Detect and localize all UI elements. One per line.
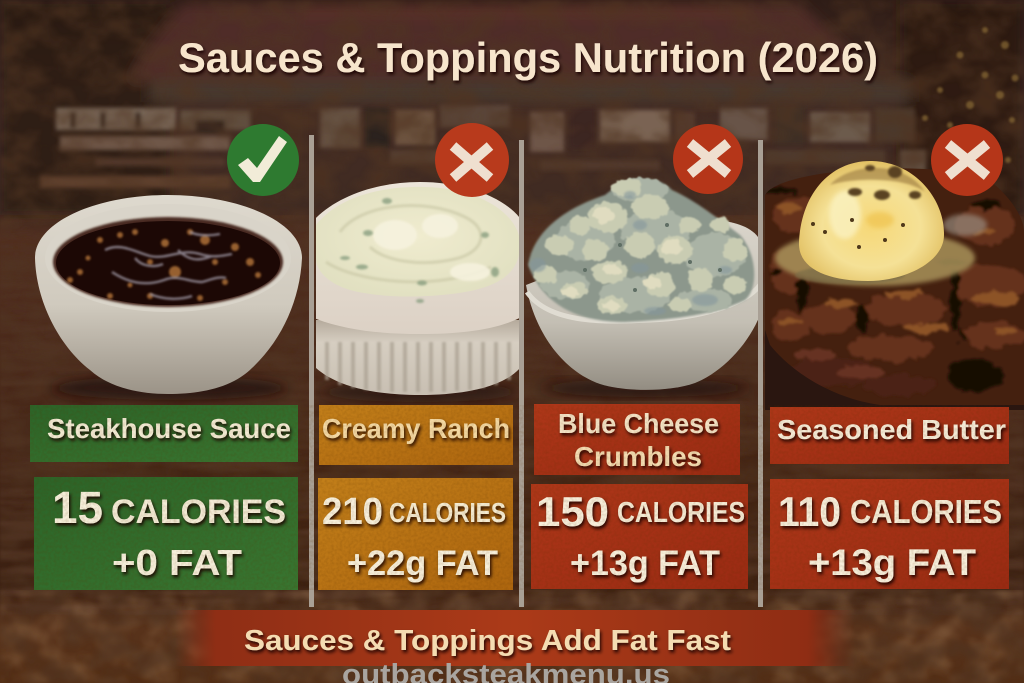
badge: x, seasoned butter [931,124,1003,196]
panel: creamy ranch stats: 210 [322,491,383,533]
panel: steakhouse sauce label: Steakhouse Sauce [47,413,291,444]
cheese crumbs [528,178,754,322]
title: Sauces & Toppings Nutrition (2026) [178,34,878,81]
bowl: steakhouse sauce [35,195,302,400]
badge: x, creamy ranch [435,123,509,197]
panel: seasoned butter label: Seasoned Butter [777,414,1006,445]
panel: seasoned butter stats: 110 [778,488,841,535]
ranch cream [316,187,520,303]
ramekin: creamy ranch [316,182,519,405]
panel: creamy ranch label [319,405,513,465]
panel: blue cheese stats: +13g FAT [570,544,720,583]
panel: seasoned butter stats [770,479,1009,589]
sauce surface [56,221,280,305]
panel: creamy ranch stats: CALORIES [389,497,506,528]
butter pat [775,161,987,286]
steak with seasoned butter [764,161,1024,410]
panel: steakhouse sauce stats: CALORIES [111,493,286,531]
panel: seasoned butter label [770,407,1009,464]
column dividers [309,135,763,607]
bottom banner [175,610,855,666]
panel: steakhouse sauce label [30,405,298,462]
panel: creamy ranch label: Creamy Ranch [322,413,510,444]
panel: blue cheese label: Blue Cheese [558,408,719,439]
panel: creamy ranch stats: +22g FAT [347,544,498,583]
panel: seasoned butter stats: +13g FAT [808,542,976,583]
panel: steakhouse sauce stats [34,477,298,590]
panel: blue cheese stats: 150 [536,488,609,535]
panel: seasoned butter stats: CALORIES [850,493,1002,530]
bottom banner: Sauces & Toppings Add Fat Fast [244,625,731,657]
grain overlay on panels [30,405,1010,590]
badge: x, blue cheese [673,124,743,194]
panel: blue cheese stats: CALORIES [617,497,745,529]
panel: creamy ranch stats [318,478,513,590]
bowl: blue cheese crumbles [526,178,760,397]
panel: steakhouse sauce stats: +0 FAT [112,542,242,583]
panel: blue cheese label [534,404,740,475]
panel: steakhouse sauce stats: 15 [52,482,103,533]
panel: blue cheese label: Crumbles [574,441,702,472]
panel: blue cheese stats [531,484,748,589]
badge: check, steakhouse sauce [227,124,299,196]
